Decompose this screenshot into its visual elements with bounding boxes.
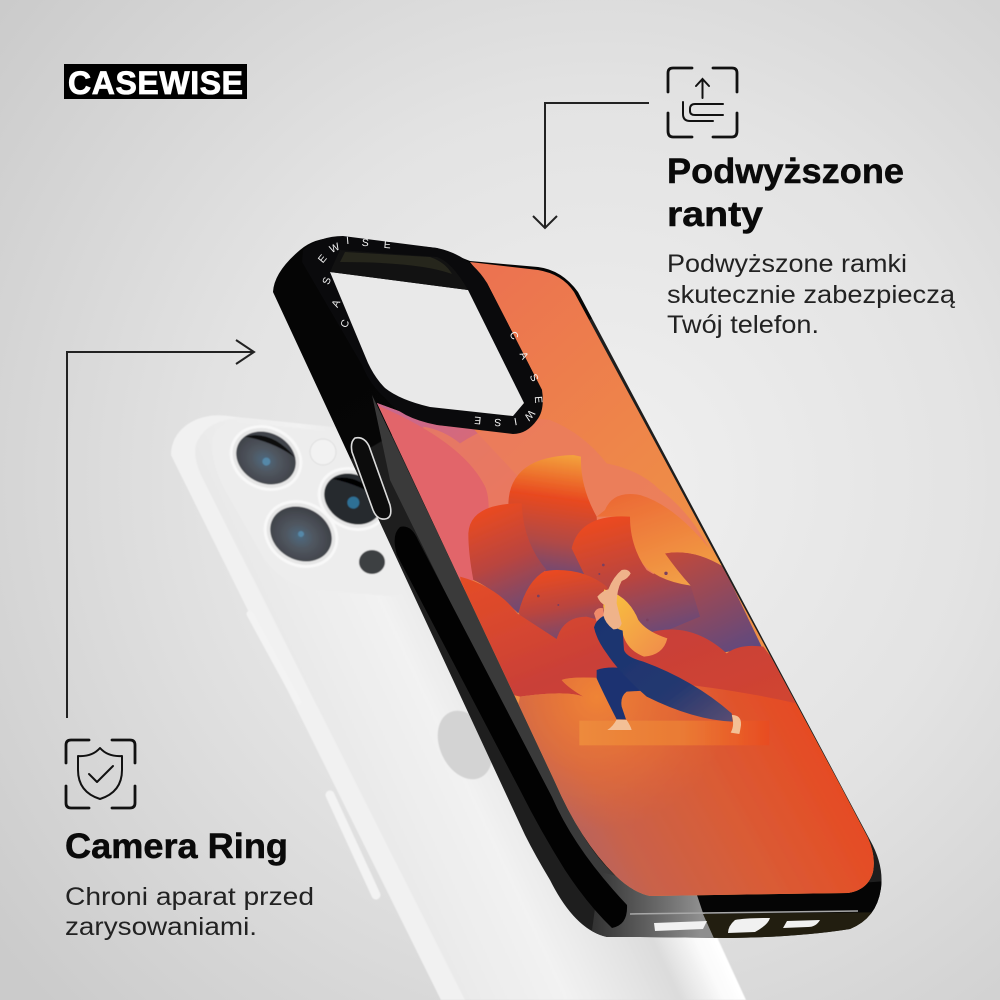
inner grey band bbox=[372, 395, 700, 915]
right purple cloud bbox=[647, 552, 762, 660]
red lower cloud bbox=[460, 576, 796, 704]
ring lettering: E bbox=[316, 253, 330, 266]
top-left pink wash bbox=[377, 403, 480, 590]
ground bbox=[473, 677, 1000, 920]
lens bottom bbox=[254, 489, 348, 579]
side slot bbox=[395, 527, 627, 928]
case body bbox=[273, 238, 882, 938]
ring lettering: W bbox=[521, 407, 537, 423]
text: raised edges description: Podwyższone ramki bbox=[667, 250, 907, 278]
ground glow bbox=[518, 678, 702, 807]
speckles bbox=[537, 564, 668, 621]
icon: raised edges bbox=[668, 68, 737, 137]
ring lettering: E bbox=[474, 414, 482, 426]
ring lettering bbox=[316, 235, 544, 428]
lens right bbox=[308, 457, 398, 541]
heading: raised edges: ranty bbox=[667, 195, 764, 234]
front leg bbox=[596, 668, 640, 720]
heading: camera ring: Camera Ring bbox=[65, 827, 288, 866]
ring lettering: A bbox=[329, 298, 343, 309]
lens top left bbox=[220, 415, 312, 501]
heading: raised edges: Podwyższone bbox=[667, 152, 904, 191]
ring body bbox=[302, 236, 543, 434]
artwork bbox=[378, 406, 874, 896]
icon: shield bbox=[66, 740, 135, 808]
volume button bbox=[351, 438, 391, 519]
left lump bbox=[468, 503, 547, 613]
phone case bbox=[273, 238, 900, 945]
bottom rim bbox=[592, 875, 882, 938]
heading: raised edges bbox=[667, 152, 904, 234]
ring lettering: S bbox=[494, 416, 502, 428]
ring opening bbox=[330, 272, 524, 416]
highlight line bbox=[630, 911, 858, 914]
screen base bbox=[360, 250, 890, 910]
arrow: to camera ring bbox=[67, 340, 254, 718]
text: raised edges description: skutecznie zabezpieczą bbox=[667, 281, 955, 309]
text: raised edges description: Twój telefon. bbox=[667, 311, 819, 339]
ring lettering: C bbox=[338, 317, 352, 330]
text: camera ring description bbox=[65, 883, 314, 941]
ring lettering: C bbox=[507, 330, 521, 342]
side button upper bbox=[250, 614, 298, 702]
text: camera ring description: zarysowaniami. bbox=[65, 913, 257, 941]
arrow: to raised edges bbox=[533, 103, 649, 228]
ring lettering: S bbox=[527, 372, 541, 383]
ring lettering: S bbox=[361, 237, 369, 249]
ring lettering: I bbox=[513, 415, 518, 427]
orange lump bbox=[597, 494, 723, 586]
ring lettering: A bbox=[517, 350, 531, 361]
ring lettering: E bbox=[383, 239, 391, 251]
woman bbox=[594, 570, 741, 734]
near foot bbox=[731, 715, 741, 734]
ring lettering: I bbox=[346, 235, 350, 247]
purple mid cloud bbox=[518, 570, 608, 639]
ring lettering: W bbox=[328, 241, 342, 256]
torso and back leg bbox=[594, 616, 733, 722]
mid lump bbox=[572, 516, 700, 633]
pale clouds bbox=[423, 419, 708, 574]
sensor bbox=[359, 550, 385, 574]
text: camera ring description: Chroni aparat przed bbox=[65, 883, 314, 911]
ring lettering: S bbox=[320, 276, 334, 286]
apple logo shadow bbox=[427, 702, 503, 788]
hair bbox=[603, 589, 667, 657]
flash bbox=[310, 439, 336, 465]
ring inner wall bbox=[330, 250, 468, 290]
side button lower bbox=[330, 795, 376, 895]
far foot bbox=[607, 719, 632, 730]
camera ring bbox=[302, 235, 544, 434]
arm, neck and hand bbox=[597, 570, 631, 629]
phone screen illustration bbox=[377, 262, 874, 896]
logo: CASEWISE bbox=[68, 65, 243, 101]
yoga mat bbox=[579, 721, 769, 745]
tall lump bbox=[508, 455, 600, 580]
camera plateau bbox=[212, 422, 405, 596]
bottom openings bbox=[654, 918, 820, 933]
white phone back bbox=[171, 415, 746, 1000]
text: raised edges description bbox=[667, 250, 955, 339]
ring lettering: E bbox=[532, 396, 544, 404]
